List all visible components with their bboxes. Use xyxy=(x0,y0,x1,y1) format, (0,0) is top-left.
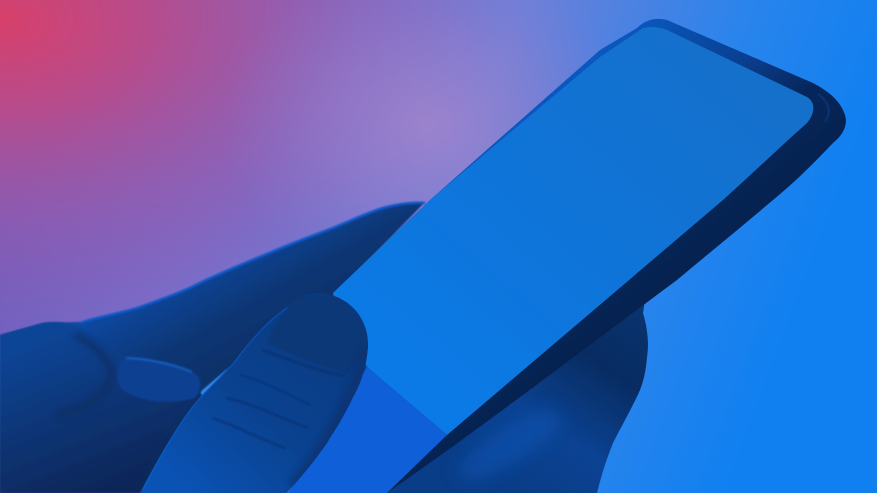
hand: thumb xyxy=(140,293,368,493)
knuckle shading xyxy=(55,335,112,415)
phone screen lower wedge xyxy=(288,367,447,493)
phone body xyxy=(333,19,846,493)
index fingernail xyxy=(117,356,200,402)
lit palm highlight xyxy=(458,408,561,482)
phone bevel highlight xyxy=(818,94,829,122)
hand: back finger xyxy=(0,202,425,493)
thumb knuckle wrinkles xyxy=(212,350,345,448)
thumbnail xyxy=(267,295,375,373)
hand: index finger and palm xyxy=(0,322,202,493)
hand: right fingers behind phone xyxy=(387,304,648,493)
bright sliver between finger and thumb xyxy=(200,366,232,400)
nail highlight xyxy=(126,358,192,372)
thumb right shadow xyxy=(295,350,368,488)
phone xyxy=(288,19,846,493)
thumb left rim light xyxy=(143,307,287,490)
phone screen xyxy=(333,27,813,435)
